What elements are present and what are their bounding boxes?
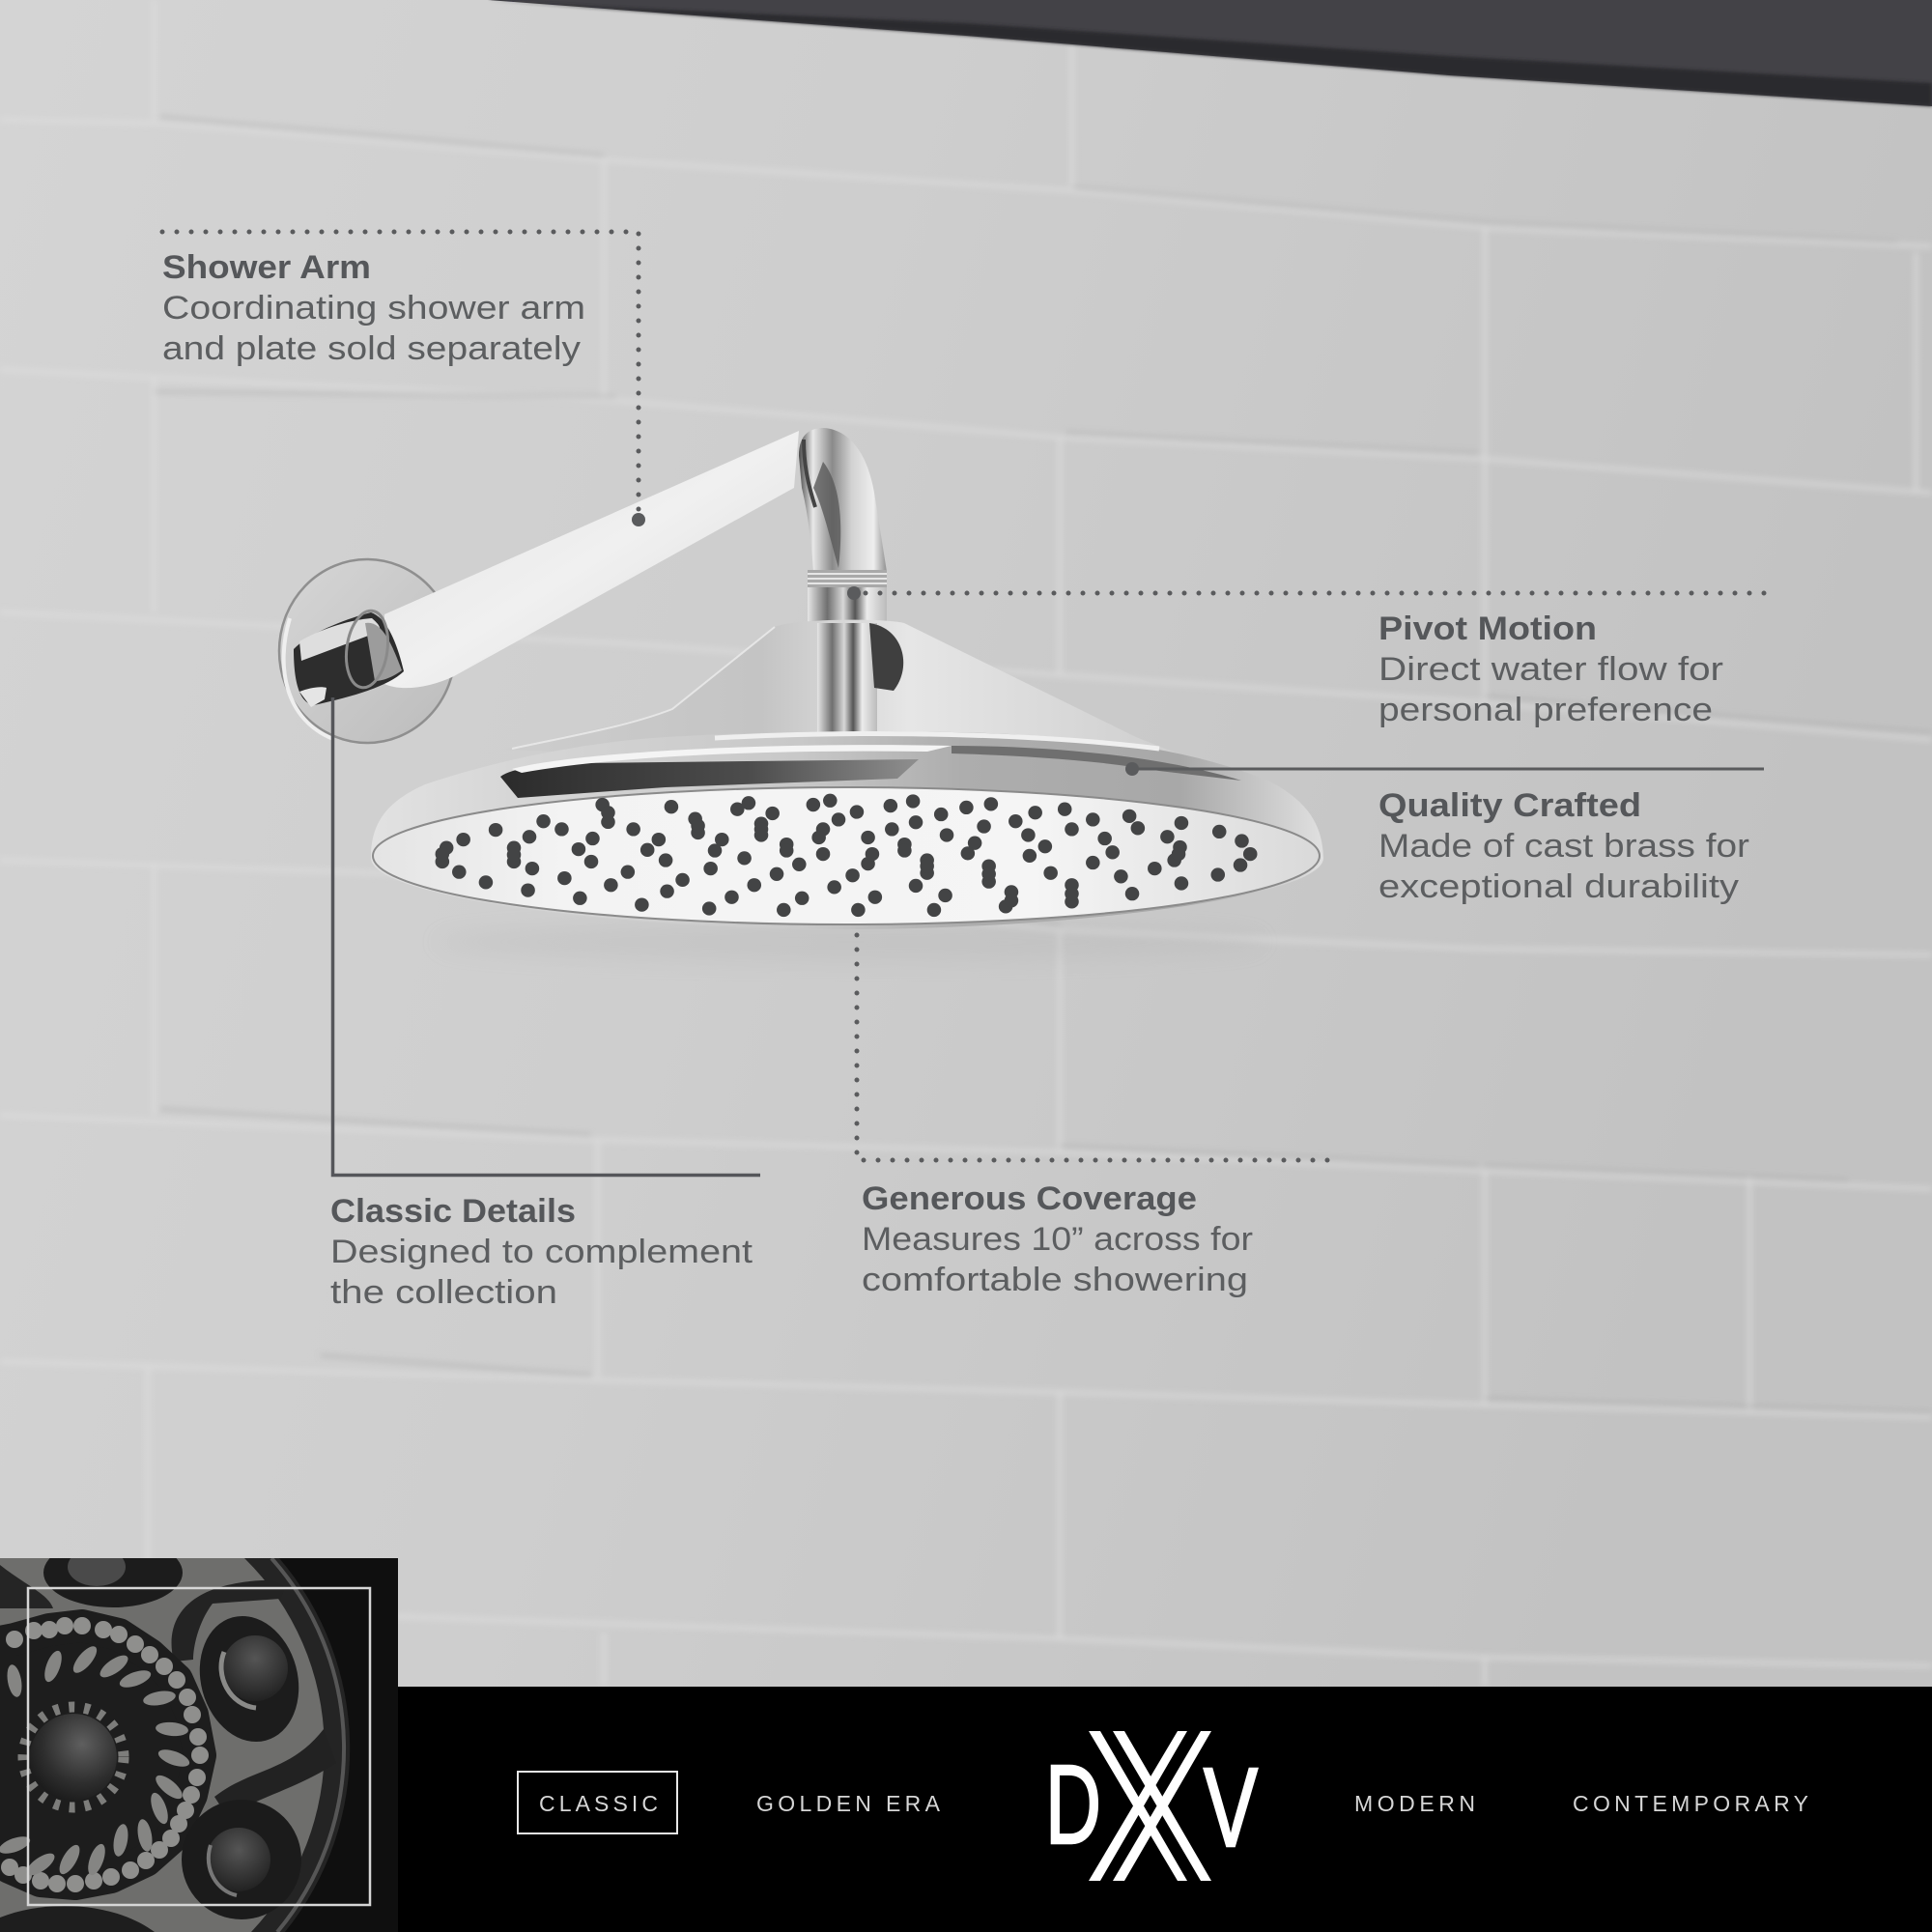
callout: quality crafted: Quality Crafted [1378, 787, 1641, 824]
dark frame band at top [488, 0, 1932, 106]
callout: pivot motion: personal preference [1378, 692, 1713, 728]
pivot ring [808, 570, 887, 624]
callout: generous coverage: comfortable showering [862, 1262, 1248, 1298]
leader: generous coverage dotted [857, 935, 1330, 1160]
beads [1, 1617, 209, 1892]
bottom scrolls [0, 1906, 155, 1932]
callout: generous coverage [862, 1180, 1253, 1298]
inner frame [28, 1588, 370, 1905]
callout: pivot motion: Pivot Motion [1378, 611, 1597, 647]
wall shadow [435, 923, 1265, 961]
callout: classic details: Classic Details [330, 1193, 576, 1230]
sunburst rays [23, 1707, 124, 1807]
wall plate [279, 559, 455, 743]
callout: quality crafted [1378, 787, 1749, 905]
vine [214, 1729, 325, 1804]
classic selected label: CLASSIC [539, 1791, 658, 1816]
callout: pivot motion [1378, 611, 1723, 728]
golden era label: GOLDEN ERA [756, 1791, 941, 1816]
gooseneck [799, 428, 887, 572]
medallion disc [244, 1558, 350, 1932]
spray nozzles [436, 794, 1257, 917]
ornament swatch [0, 1538, 398, 1932]
DXV logo: D [1045, 1742, 1101, 1867]
DXV logo [1045, 1731, 1258, 1881]
top scroll [43, 1558, 183, 1607]
callout: classic details [330, 1193, 753, 1311]
callout: shower arm: Shower Arm [162, 249, 371, 286]
callout: generous coverage: Generous Coverage [862, 1180, 1197, 1217]
rim [371, 731, 1323, 929]
callout: classic details: the collection [330, 1274, 557, 1311]
neck column [817, 623, 903, 736]
shower head photo [279, 428, 1323, 961]
spray face [373, 787, 1320, 924]
arm collar [294, 608, 404, 707]
callout: shower arm: and plate sold separately [162, 330, 581, 367]
leader: classic details solid [332, 697, 760, 1175]
callout: classic details: Designed to complement [330, 1234, 753, 1270]
callout: shower arm: Coordinating shower arm [162, 290, 585, 327]
center dome [33, 1714, 117, 1793]
leader: quality crafted solid [1125, 762, 1764, 776]
callout: quality crafted: exceptional durability [1378, 868, 1739, 905]
modern label: MODERN [1354, 1791, 1475, 1816]
cone [504, 620, 1238, 778]
leader: shower arm dotted [162, 232, 645, 526]
callout: shower arm [162, 249, 585, 367]
upper scroll [199, 1616, 299, 1742]
lower scroll [182, 1800, 301, 1919]
DXV logo: V [1204, 1745, 1258, 1870]
contemporary label: CONTEMPORARY [1573, 1791, 1808, 1816]
footer bar [0, 1687, 1932, 1932]
rim reflections [500, 734, 1241, 798]
classic selected label [518, 1772, 677, 1833]
shower arm [384, 431, 799, 688]
callout: pivot motion: Direct water flow for [1378, 651, 1723, 688]
leaf top [172, 1580, 283, 1662]
leader: pivot motion dotted [847, 586, 1766, 600]
callout: generous coverage: Measures 10” across for [862, 1221, 1253, 1258]
leaves [0, 1642, 191, 1879]
callout: quality crafted: Made of cast brass for [1378, 828, 1749, 865]
paisley band [0, 1626, 200, 1884]
